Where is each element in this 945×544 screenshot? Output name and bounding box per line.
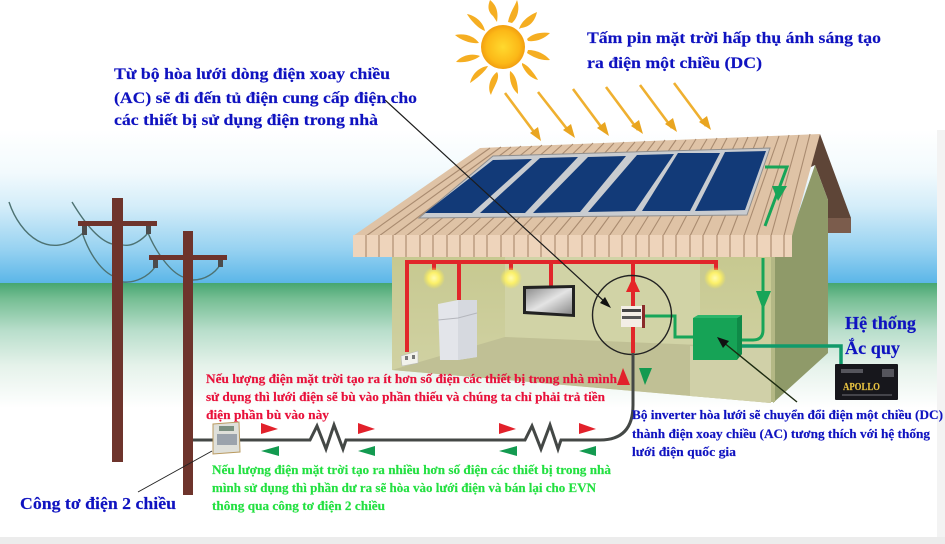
text: battery system: Hệ thống xyxy=(845,313,916,333)
text: surplus explanation: mình sử dụng thì phần dư ra sẽ hòa vào lưới điện và bán lại cho EVN xyxy=(212,480,597,495)
text: inverter description: lưới điện quốc gia xyxy=(632,444,737,459)
arrows: red flow to house xyxy=(261,368,630,434)
battery: APOLLO xyxy=(843,382,880,393)
icon: inverter box xyxy=(693,315,742,360)
text: AC from inverter to panel xyxy=(114,66,417,129)
arrow: green DC down from panels xyxy=(772,186,787,201)
text: shortfall explanation xyxy=(206,371,618,422)
text: AC from inverter to panel: (AC) sẽ đi đến tủ điện cung cấp điện cho xyxy=(114,90,417,107)
icon: two-way meter xyxy=(213,422,240,454)
icon: sun xyxy=(455,0,550,95)
house: roof with tiles xyxy=(353,134,820,257)
text: surplus explanation: Nếu lượng điện mặt trời tạo ra nhiều hơn số điện các thiết bị trong nhà xyxy=(212,462,612,477)
icon: television xyxy=(523,285,575,317)
text: surplus explanation: thông qua công tơ điện 2 chiều xyxy=(212,498,385,513)
icon: distribution panel xyxy=(621,305,645,328)
leader line: AC to distribution panel xyxy=(385,100,611,308)
arrows: green flow to grid xyxy=(261,368,652,456)
house: gable eave xyxy=(805,134,851,233)
text: surplus explanation xyxy=(212,462,612,513)
icon: light bulbs xyxy=(423,267,726,289)
text: shortfall explanation: sử dụng thì lưới điện sẽ bù vào phần thiếu và chúng ta chỉ phải trả tiền xyxy=(206,389,606,404)
icon: power socket xyxy=(401,351,418,366)
text: AC from inverter to panel: Từ bộ hòa lưới dòng điện xoay chiều xyxy=(114,66,390,83)
text: shortfall explanation: điện phần bù vào này xyxy=(206,407,330,422)
text: panels absorb sunlight: Tấm pin mặt trời hấp thụ ánh sáng tạo xyxy=(587,30,881,47)
arrow: red up in house xyxy=(626,277,640,292)
text: inverter description xyxy=(632,407,943,459)
text: inverter description: Bộ inverter hòa lưới sẽ chuyển đổi điện một chiều (DC) xyxy=(632,407,943,422)
arrows: sunlight rays xyxy=(505,83,711,141)
text: battery system: Ắc quy xyxy=(845,337,900,358)
text: battery system xyxy=(845,313,916,358)
grid cable with resistor symbols xyxy=(193,353,633,449)
text: panels absorb sunlight xyxy=(587,30,881,72)
house: walls and interior xyxy=(392,165,828,403)
text: AC from inverter to panel: các thiết bị sử dụng điện trong nhà xyxy=(114,112,378,129)
red AC wiring xyxy=(407,262,716,353)
circle highlight around panel xyxy=(592,276,672,354)
solar panels xyxy=(419,148,770,218)
text: panels absorb sunlight: ra điện một chiều (DC) xyxy=(587,55,762,72)
green DC wiring xyxy=(645,167,841,366)
power poles xyxy=(9,198,227,495)
text: two-way meter label: Công tơ điện 2 chiều xyxy=(20,494,176,513)
leader line: meter xyxy=(138,451,212,492)
text: shortfall explanation: Nếu lượng điện mặt trời tạo ra ít hơn số điện các thiết bị trong nhà mình xyxy=(206,371,618,386)
icon: refrigerator xyxy=(438,300,477,360)
battery xyxy=(835,364,898,400)
text: inverter description: thành điện xoay chiều (AC) tương thích với hệ thống xyxy=(632,426,930,441)
arrow: green DC down to inverter xyxy=(756,291,771,310)
leader line: inverter xyxy=(717,337,797,402)
